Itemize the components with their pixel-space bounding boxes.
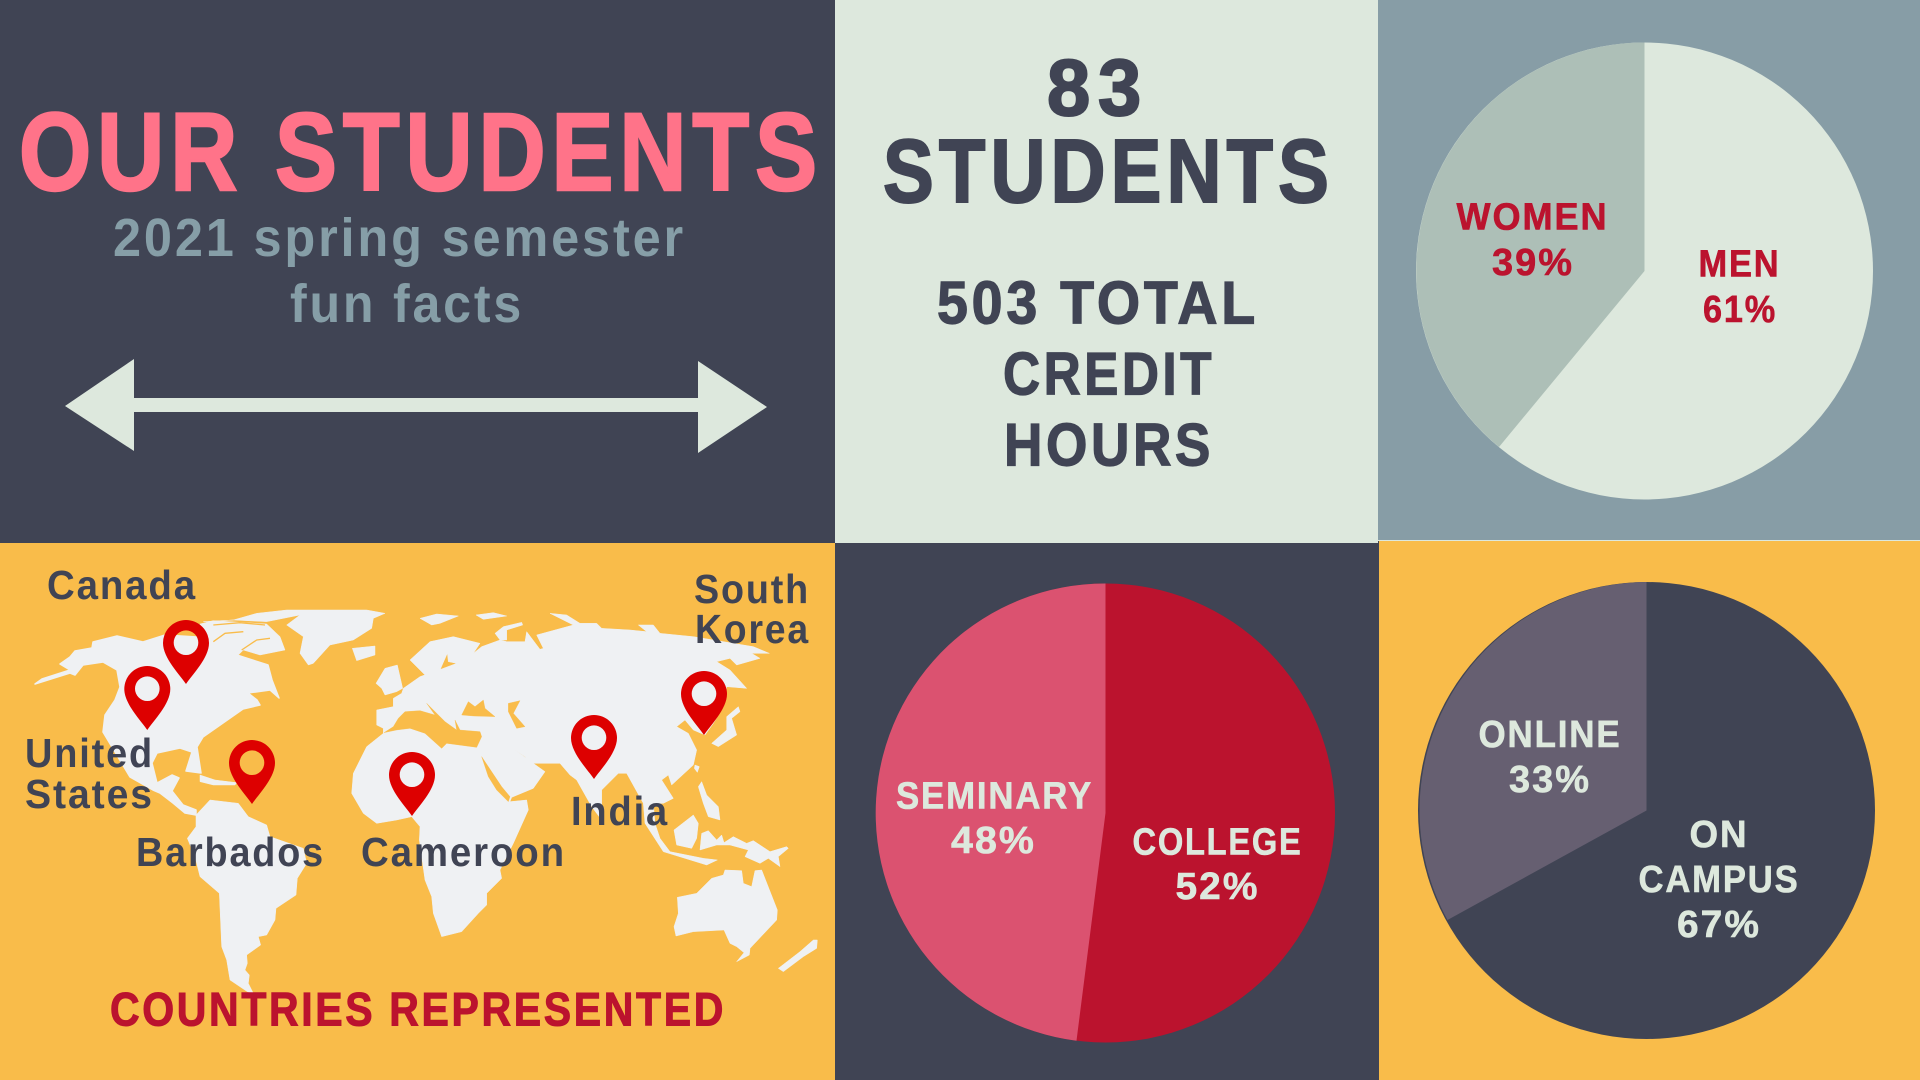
label: college <box>1132 822 1302 908</box>
label: women: WOMEN <box>1456 196 1608 238</box>
label: men: MEN <box>1698 244 1780 286</box>
panel: school pie <box>835 543 1379 1080</box>
label: united states <box>25 730 154 817</box>
icon: pin united states <box>124 666 170 730</box>
heading: countries represented: COUNTRIES REPRESENTED <box>110 982 726 1036</box>
icon: pin cameroon <box>389 752 435 816</box>
label: online <box>1478 714 1622 801</box>
label: online: 33% <box>1509 759 1591 801</box>
label: seminary: 48% <box>951 820 1036 862</box>
label: cameroon: Cameroon <box>361 829 566 875</box>
number of students <box>883 43 1334 222</box>
subtitle line one: 2021 spring semester <box>113 208 686 268</box>
number of students: STUDENTS <box>883 122 1334 222</box>
pie chart: on campus and online <box>1418 582 1875 1039</box>
label: india: India <box>571 788 669 834</box>
label: south korea <box>694 566 810 652</box>
label: barbados: Barbados <box>136 829 325 875</box>
label: women <box>1456 196 1608 284</box>
label: on campus: 67% <box>1677 904 1761 946</box>
total credit hours: HOURS <box>1004 412 1214 478</box>
total credit hours <box>937 270 1259 478</box>
label: south korea: South <box>694 566 810 612</box>
total credit hours: CREDIT <box>1003 340 1215 408</box>
label: united states: United <box>25 730 154 776</box>
total credit hours: 503 TOTAL <box>937 270 1259 336</box>
label: on campus: ON <box>1690 814 1748 856</box>
icon: pin south korea <box>681 671 727 735</box>
subtitle line two: fun facts <box>290 274 524 334</box>
label: on campus <box>1638 814 1800 946</box>
label: united states: States <box>25 771 154 817</box>
panel: title <box>0 0 835 543</box>
panel: gender pie <box>1378 0 1920 541</box>
icon: pin canada <box>163 620 209 684</box>
world map <box>35 610 817 993</box>
label: college: 52% <box>1176 866 1260 908</box>
pie chart: men and women <box>1416 42 1873 500</box>
label: seminary: SEMINARY <box>896 776 1093 818</box>
label: college: COLLEGE <box>1132 822 1302 864</box>
label: on campus: CAMPUS <box>1638 859 1800 901</box>
pie chart: college and seminary <box>876 583 1335 1042</box>
label: women: 39% <box>1492 242 1574 284</box>
icon: pin india <box>571 715 617 779</box>
label: canada: Canada <box>47 562 197 608</box>
label: seminary <box>896 776 1093 862</box>
panel: campus pie <box>1379 541 1920 1080</box>
label: men <box>1698 244 1780 331</box>
panel: countries map <box>0 543 835 1080</box>
icon: pin barbados <box>229 740 275 804</box>
panel: student totals <box>835 0 1378 543</box>
label: online: ONLINE <box>1478 714 1622 756</box>
label: men: 61% <box>1703 289 1777 331</box>
heading: our students: OUR STUDENTS <box>19 91 823 214</box>
arrow: double headed <box>65 359 767 453</box>
number of students: 83 <box>1047 43 1149 132</box>
label: south korea: Korea <box>695 606 810 652</box>
